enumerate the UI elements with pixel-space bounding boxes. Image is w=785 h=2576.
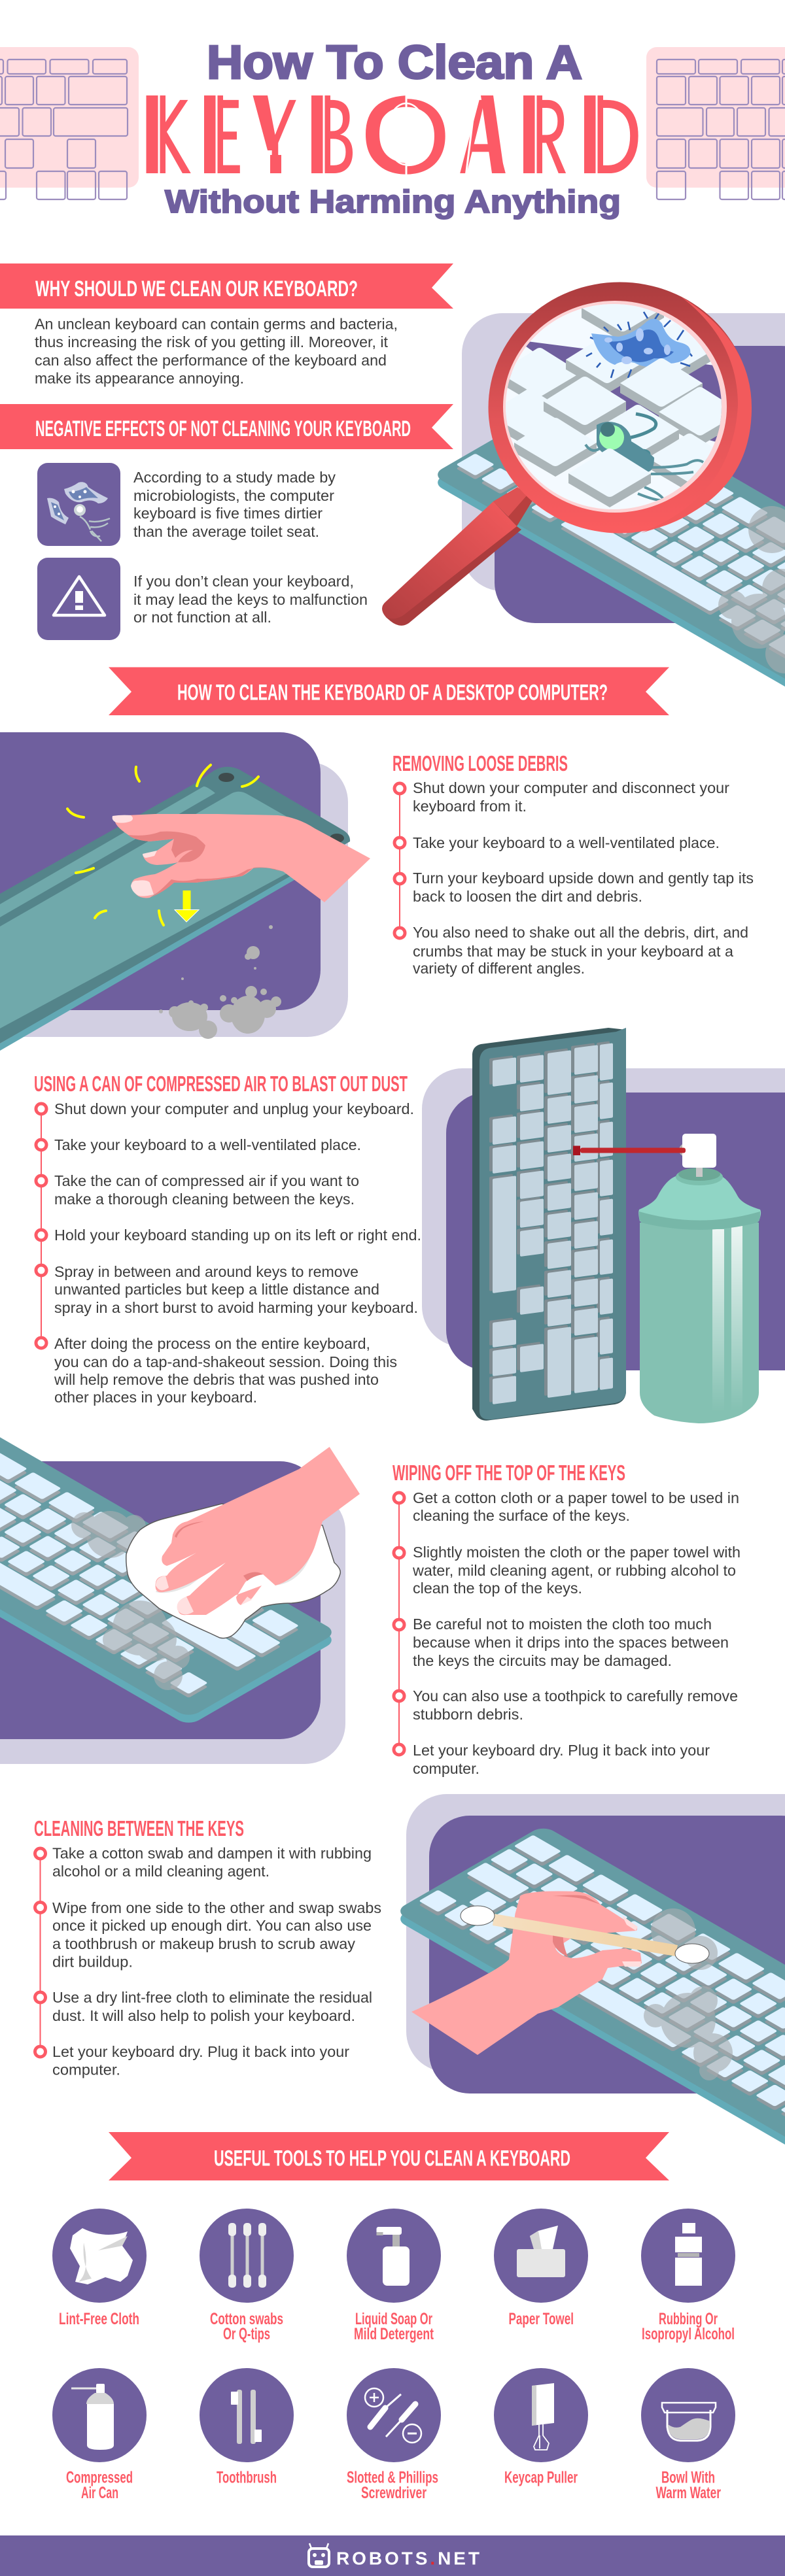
tool: liquid soap: Liquid Soap Or: [355, 2310, 432, 2328]
timeline: compressed air steps: Spray in between and around keys to remove: [54, 1263, 358, 1280]
timeline: wiping steps: [394, 1489, 741, 1777]
timeline: wiping steps: clean the top of the keys.: [413, 1580, 582, 1597]
icon: germs box: [37, 463, 120, 546]
icon: hand holding swab: [411, 1891, 709, 2055]
timeline: wiping steps: stubborn debris.: [413, 1706, 523, 1723]
panel: purple backdrop: [446, 1093, 785, 1370]
timeline: between keys steps: alcohol or a mild cleaning agent.: [52, 1863, 270, 1880]
banner: useful tools: [109, 2132, 669, 2180]
heading: cleaning between keys: CLEANING BETWEEN THE KEYS: [34, 1816, 244, 1840]
panel: purple backdrop: [429, 1816, 785, 2093]
timeline: compressed air steps: Hold your keyboard standing up on its left or right end.: [54, 1227, 421, 1244]
timeline: removing loose debris steps: Shut down your computer and disconnect your: [413, 779, 729, 796]
heading: removing loose debris: REMOVING LOOSE DEBRIS: [392, 751, 568, 775]
tool: toothbrush: Toothbrush: [217, 2469, 277, 2487]
title: KEYBOARD stencil word: O: [362, 76, 451, 196]
text block: why clean: make its appearance annoying.: [35, 370, 244, 387]
icon: green germ: [585, 414, 703, 500]
timeline: between keys steps: dust. It will also help to polish your keyboard.: [52, 2007, 355, 2024]
title: KEYBOARD stencil word: R: [519, 76, 569, 196]
timeline: removing loose debris steps: back to loosen the dirt and debris.: [413, 888, 642, 905]
timeline: between keys steps: Use a dry lint-free cloth to eliminate the residual: [52, 1989, 372, 2006]
title: KEYBOARD stencil word: E: [200, 76, 243, 196]
timeline: compressed air steps: Shut down your computer and unplug your keyboard.: [54, 1100, 414, 1117]
icon: robot logo: [309, 2543, 329, 2567]
timeline: wiping steps: Let your keyboard dry. Plug it back into your: [413, 1742, 710, 1759]
timeline: between keys steps: [35, 1845, 381, 2078]
illustration: removing loose debris: [0, 732, 370, 1051]
timeline: between keys steps: Wipe from one side to the other and swap swabs: [52, 1899, 381, 1916]
banner: useful tools: USEFUL TOOLS TO HELP YOU CLEAN A KEYBOARD: [214, 2146, 570, 2171]
text block: malfunction: If you don’t clean your keyboard,: [133, 573, 354, 590]
timeline: compressed air steps: make a thorough cleaning between the keys.: [54, 1191, 355, 1208]
banner: why should we clean: [0, 263, 453, 309]
logo text: ROBOTS.NET: [336, 2549, 480, 2568]
tool: keycap puller: [494, 2368, 588, 2487]
timeline: between keys steps: a toothbrush or makeup brush to scrub away: [52, 1935, 356, 1952]
timeline: between keys steps: computer.: [52, 2061, 120, 2078]
timeline: removing loose debris steps: You also need to shake out all the debris, dirt, and: [413, 924, 748, 941]
title: KEYBOARD stencil word: A: [460, 76, 506, 196]
heading: wiping: WIPING OFF THE TOP OF THE KEYS: [392, 1461, 625, 1485]
banner: why should we clean: WHY SHOULD WE CLEAN OUR KEYBOARD?: [35, 277, 358, 301]
timeline: compressed air steps: [36, 1100, 421, 1406]
illustration: magnifying glass over keyboard: [382, 282, 785, 731]
title: KEYBOARD stencil word: K: [143, 76, 192, 196]
icon: blue germ: [586, 312, 692, 378]
tool: compressed air can: Compressed: [66, 2469, 133, 2487]
banner: negative effects: NEGATIVE EFFECTS OF NOT CLEANING YOUR KEYBOARD: [35, 416, 411, 441]
tool: screwdrivers: [347, 2368, 441, 2502]
tool: cotton swabs: Cotton swabs: [210, 2310, 283, 2328]
illustration: wiping keys: [0, 1383, 360, 1764]
text block: malfunction: it may lead the keys to malfunction: [133, 591, 368, 608]
timeline: compressed air steps: After doing the process on the entire keyboard,: [54, 1335, 370, 1352]
timeline: compressed air steps: Take your keyboard to a well-ventilated place.: [54, 1136, 361, 1153]
tool: paper towel: [494, 2209, 588, 2328]
timeline: wiping steps: You can also use a toothpick to carefully remove: [413, 1687, 738, 1704]
keyboard: upright: [472, 1028, 626, 1421]
title: KEYBOARD stencil word: B: [307, 76, 357, 196]
timeline: wiping steps: computer.: [413, 1760, 480, 1777]
icon: air spray jet: [573, 1145, 686, 1155]
timeline: removing loose debris steps: [394, 779, 754, 977]
tool: rubbing alcohol: Isopropyl Alcohol: [642, 2325, 735, 2343]
timeline: compressed air steps: unwanted particles but keep a little distance and: [54, 1281, 379, 1298]
timeline: wiping steps: because when it drips into the spaces between: [413, 1634, 729, 1651]
banner: negative effects: [0, 404, 453, 449]
tool: bowl with water: [641, 2368, 735, 2502]
icon: dust pile: [159, 925, 281, 1039]
timeline: between keys steps: dirt buildup.: [52, 1954, 133, 1971]
timeline: wiping steps: water, mild cleaning agent, or rubbing alcohol to: [412, 1562, 736, 1579]
timeline: between keys steps: once it picked up enough dirt. You can also use: [52, 1917, 372, 1934]
timeline: between keys steps: Take a cotton swab and dampen it with rubbing: [52, 1845, 372, 1862]
arrow: yellow down: [175, 890, 199, 922]
icon: cleaning cloth: [126, 1504, 340, 1638]
timeline: wiping steps: cleaning the surface of the keys.: [413, 1507, 630, 1524]
text block: study: microbiologists, the computer: [133, 487, 334, 504]
panel: purple backdrop: [495, 346, 785, 623]
icon: wiping hand: [156, 1447, 360, 1615]
text block: study: than the average toilet seat.: [133, 523, 319, 540]
timeline: between keys steps: Let your keyboard dry. Plug it back into your: [52, 2043, 349, 2060]
text block: why clean: [35, 315, 398, 387]
timeline: wiping steps: Slightly moisten the cloth or the paper towel with: [413, 1544, 741, 1561]
text block: malfunction: [133, 573, 368, 626]
panel: lavender backdrop: [0, 1491, 345, 1764]
timeline: removing loose debris steps: Take your keyboard to a well-ventilated place.: [413, 834, 720, 851]
tool: screwdrivers: Slotted & Phillips: [347, 2469, 438, 2487]
tool: bowl with water: Warm Water: [655, 2484, 721, 2502]
tool: liquid soap: [347, 2209, 441, 2343]
illustration: cotton swab between keys: [394, 1794, 785, 2167]
panel: lavender backdrop: [406, 1794, 785, 2072]
timeline: compressed air steps: spray in a short burst to avoid harming your keyboard.: [54, 1299, 418, 1316]
timeline: wiping steps: the keys the circuits may be damaged.: [413, 1652, 672, 1669]
tool: lint-free cloth: [52, 2209, 147, 2328]
text block: why clean: can also affect the performance of the keyboard and: [35, 352, 387, 369]
timeline: compressed air steps: Take the can of compressed air if you want to: [54, 1172, 359, 1189]
text block: why clean: thus increasing the risk of you getting ill. Moreover, it: [35, 333, 389, 350]
timeline: wiping steps: Be careful not to moisten the cloth too much: [413, 1616, 712, 1633]
tool: cotton swabs: Or Q-tips: [223, 2325, 270, 2343]
tool: liquid soap: Mild Detergent: [354, 2325, 434, 2343]
tool: lint-free cloth: Lint-Free Cloth: [59, 2310, 139, 2328]
icon: hand tapping: [113, 814, 370, 902]
keyboard: swab: [394, 1825, 785, 2167]
title: KEYBOARD stencil word: D: [580, 76, 642, 196]
keyboard: top illustration: [432, 388, 785, 731]
icon: spray can: [638, 1134, 761, 1423]
panel: purple backdrop: [0, 732, 321, 1010]
timeline: compressed air steps: you can do a tap-and-shakeout session. Doing this: [54, 1353, 397, 1370]
icon: magnifier lens: [488, 282, 752, 534]
keyboard: underside: [0, 767, 350, 1051]
tool: rubbing alcohol: [641, 2209, 735, 2343]
timeline: removing loose debris steps: keyboard from it.: [413, 798, 527, 815]
tool: compressed air can: [52, 2368, 147, 2502]
header: left pink keyboard panel: [0, 47, 139, 199]
timeline: removing loose debris steps: crumbs that may be stuck in your keyboard at a: [413, 943, 733, 960]
tool: paper towel: Paper Towel: [509, 2310, 574, 2328]
title: Without Harming Anything: Without Harming Anything: [165, 184, 621, 220]
header: right pink keyboard panel: [646, 47, 785, 199]
panel: lavender backdrop: [462, 313, 785, 591]
timeline: removing loose debris steps: variety of different angles.: [413, 960, 585, 977]
tool: toothbrush: [200, 2368, 294, 2487]
text block: malfunction: or not function at all.: [133, 609, 271, 626]
tool: cotton swabs: [200, 2209, 294, 2343]
text block: study: [133, 469, 336, 540]
panel: purple backdrop: [0, 1461, 321, 1739]
illustration: compressed air: [422, 1028, 785, 1423]
icon: magnifier handle: [382, 487, 533, 626]
icon: yellow motion marks: [67, 765, 258, 925]
heading: compressed air: USING A CAN OF COMPRESSED AIR TO BLAST OUT DUST: [34, 1072, 408, 1096]
timeline: compressed air steps: will help remove the debris that was pushed into: [54, 1371, 379, 1388]
title: How To Clean A: How To Clean A: [207, 37, 582, 89]
title: KEYBOARD stencil word: Y: [253, 76, 298, 196]
footer bar: [0, 2535, 785, 2576]
keyboard: wiping: [0, 1383, 338, 1726]
tool: compressed air can: Air Can: [81, 2484, 118, 2502]
text block: study: keyboard is five times dirtier: [133, 505, 323, 522]
tool: screwdrivers: Screwdriver: [361, 2484, 427, 2502]
tool: bowl with water: Bowl With: [661, 2469, 715, 2487]
timeline: wiping steps: Get a cotton cloth or a paper towel to be used in: [413, 1489, 739, 1506]
tool: rubbing alcohol: Rubbing Or: [659, 2310, 718, 2328]
text block: study: According to a study made by: [133, 469, 336, 486]
text block: why clean: An unclean keyboard can contain germs and bacteria,: [35, 315, 398, 332]
timeline: removing loose debris steps: Turn your keyboard upside down and gently tap its: [413, 870, 754, 887]
title: KEYBOARD stencil word: [143, 76, 642, 196]
tool: keycap puller: Keycap Puller: [504, 2469, 578, 2487]
icon: warning box: [37, 558, 120, 640]
panel: lavender backdrop: [422, 1068, 785, 1347]
timeline: compressed air steps: other places in your keyboard.: [54, 1389, 257, 1406]
panel: lavender backdrop: [0, 762, 348, 1037]
banner: desktop keyboard: [109, 667, 669, 715]
